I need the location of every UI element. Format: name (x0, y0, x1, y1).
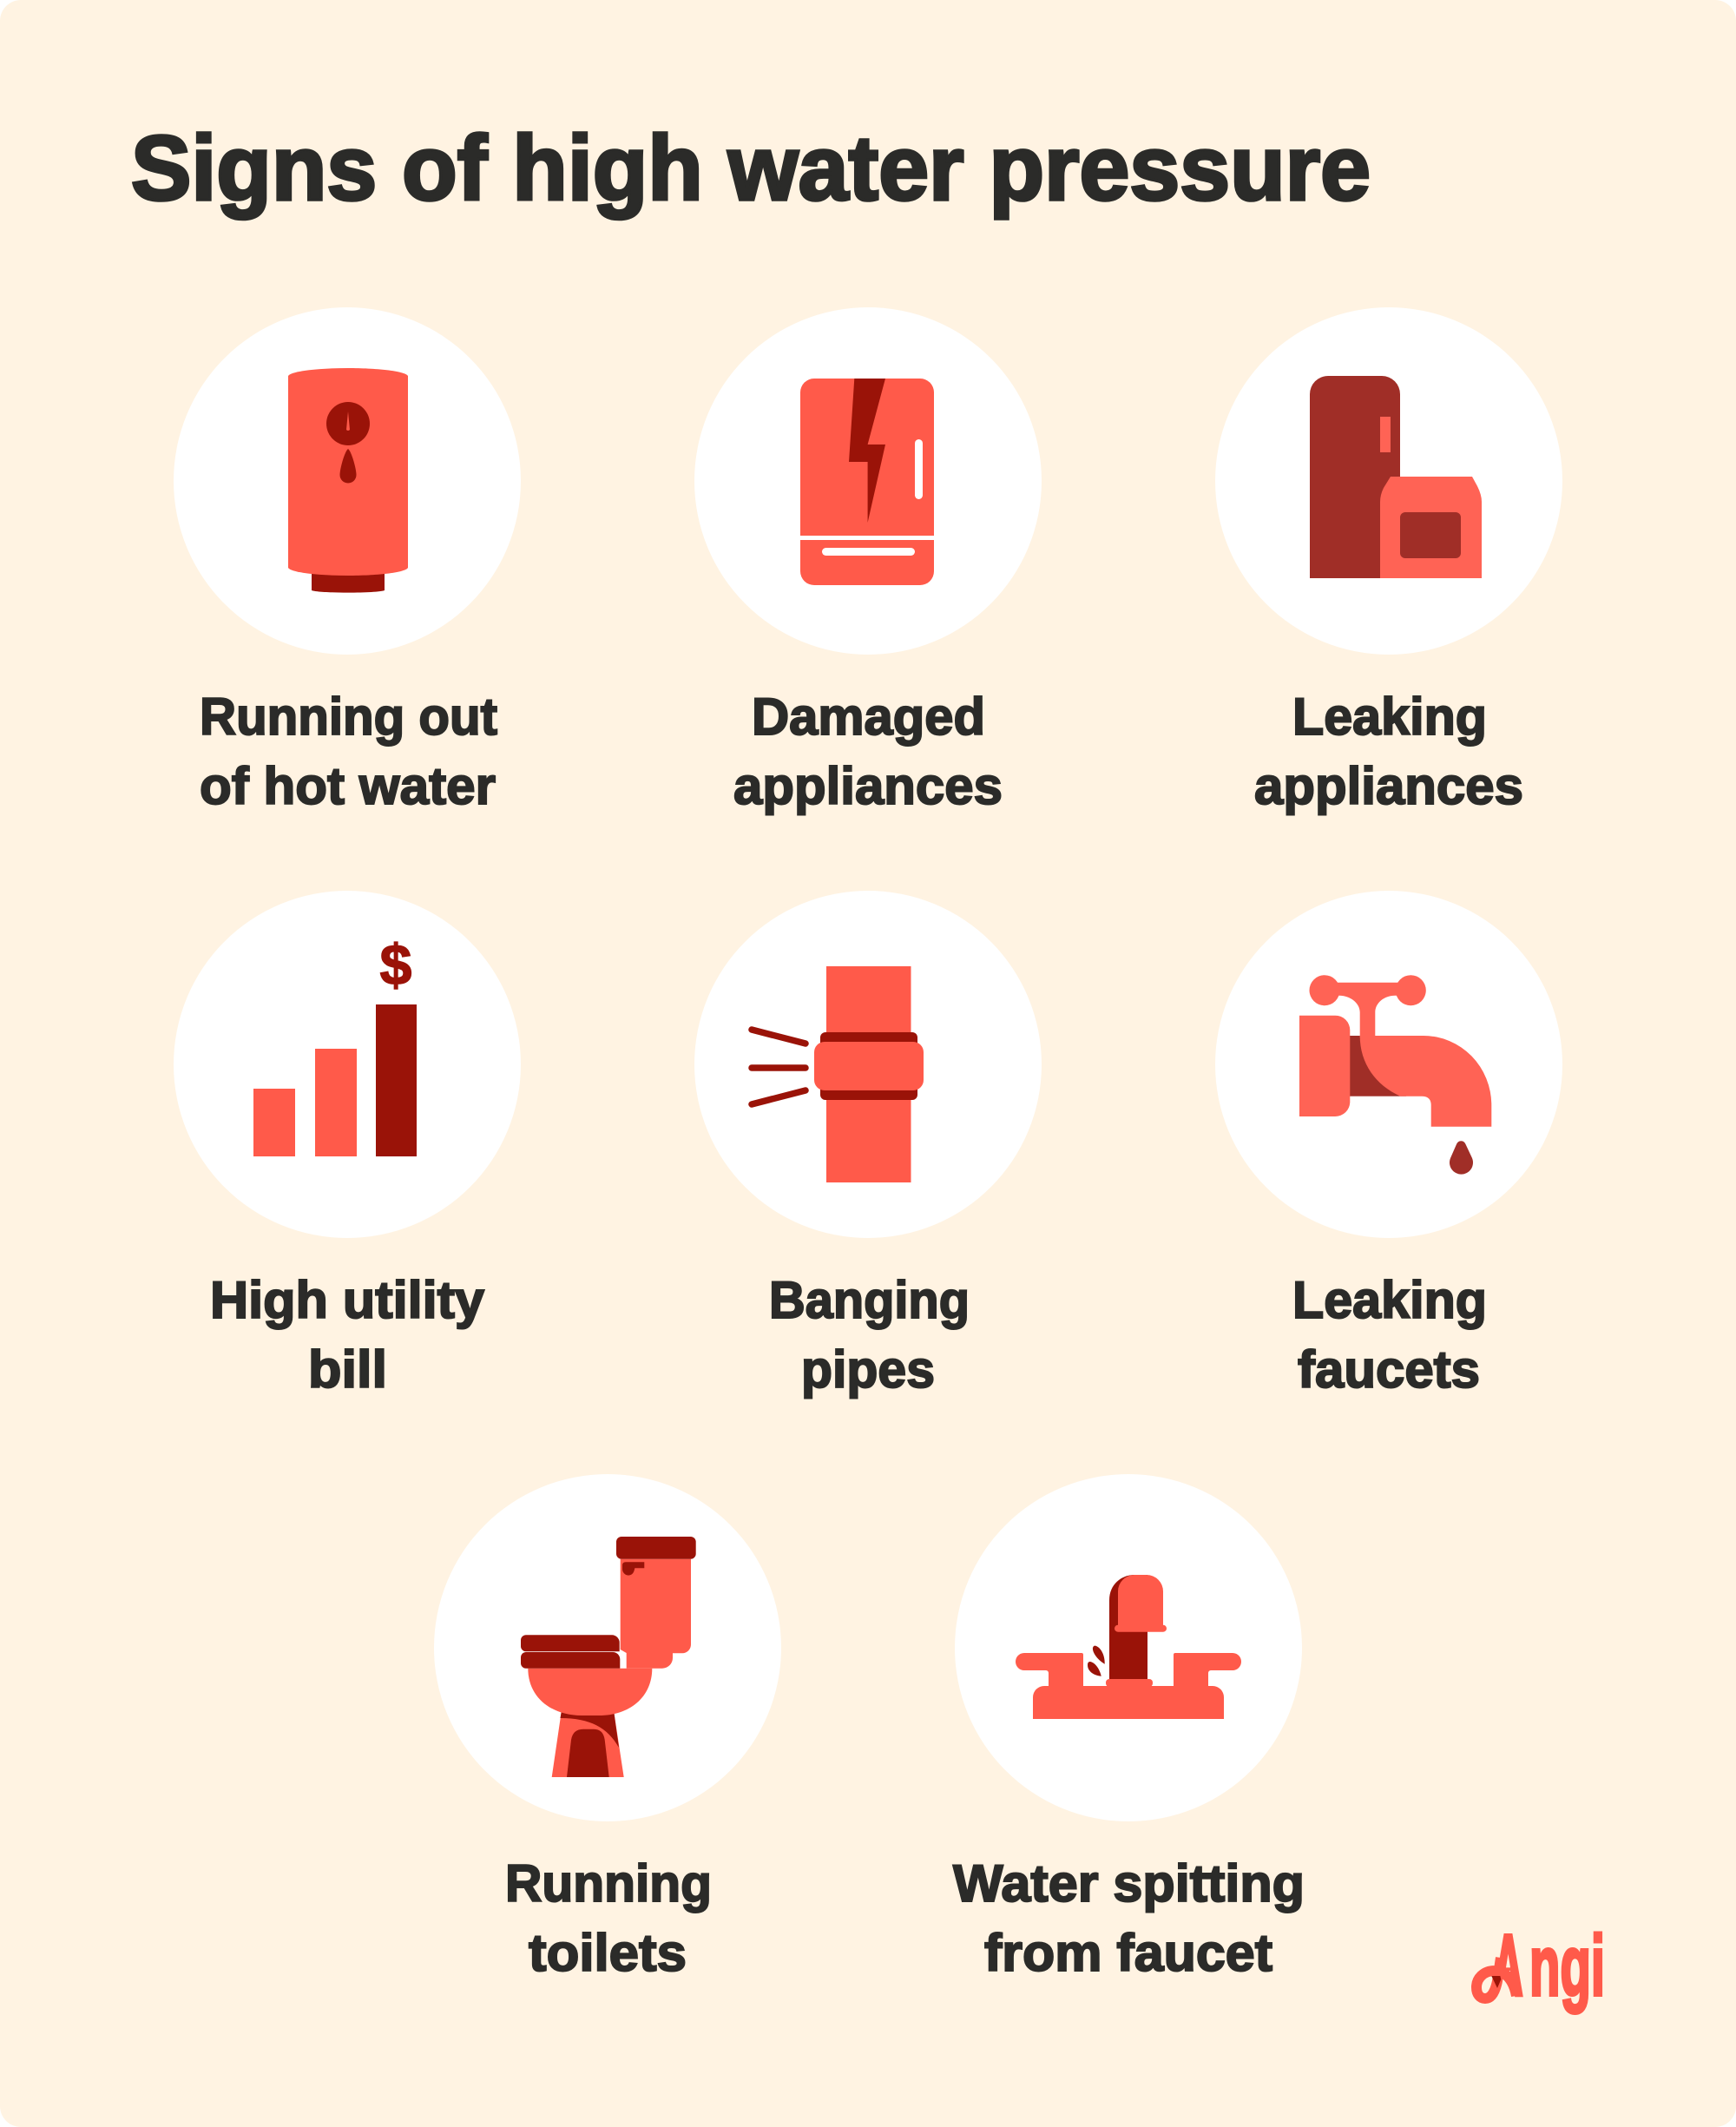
label: Banging (769, 1271, 970, 1329)
icon circle (174, 891, 521, 1238)
label (1292, 1271, 1487, 1399)
icon circle (694, 307, 1042, 655)
icon: toilet (521, 1537, 696, 1777)
panel: leaking faucets (1215, 891, 1562, 1399)
label: Running (505, 1854, 712, 1913)
panel: running out of hot water (174, 307, 521, 815)
label (953, 1854, 1305, 1982)
panel: high utility bill (174, 891, 521, 1399)
label: of hot water (200, 757, 496, 815)
icon: rising bar chart with dollar sign (253, 932, 417, 1156)
label: faucets (1298, 1340, 1480, 1399)
icon: damaged refrigerator (800, 379, 934, 585)
label: Water spitting (953, 1854, 1305, 1913)
label: appliances (733, 757, 1003, 815)
label: pipes (801, 1340, 935, 1399)
icon: rising bar chart with dollar sign: $ (380, 932, 411, 997)
panel: water spitting from faucet (953, 1474, 1305, 1982)
logo: Angi: ngi (1529, 1918, 1605, 2013)
label: Running out (200, 688, 497, 746)
icon circle (694, 891, 1042, 1238)
icon: sink faucet spitting water (1016, 1575, 1241, 1719)
icon: water heater (288, 368, 408, 593)
label: from faucet (984, 1924, 1272, 1982)
panel: banging pipes (694, 891, 1042, 1399)
label (733, 688, 1003, 815)
label: High utility (210, 1271, 485, 1329)
icon: banging pipe (752, 966, 924, 1182)
icon circle (434, 1474, 781, 1821)
label (200, 688, 497, 815)
label: bill (308, 1340, 387, 1399)
logo: Angi: A (1494, 1918, 1522, 2012)
label (1254, 688, 1523, 815)
icon circle (174, 307, 521, 655)
label: Damaged (752, 688, 985, 746)
label (210, 1271, 485, 1399)
label (505, 1854, 712, 1982)
panel: running toilets (434, 1474, 781, 1982)
icon: dripping faucet (1299, 975, 1491, 1175)
icon: refrigerator and washer (1310, 376, 1482, 578)
title: Signs of high water pressure (131, 117, 1371, 220)
panel: leaking appliances (1215, 307, 1562, 815)
label: Leaking (1292, 688, 1487, 746)
label: appliances (1254, 757, 1523, 815)
label: toilets (529, 1924, 687, 1982)
label: Leaking (1292, 1271, 1487, 1329)
panel: damaged appliances (694, 307, 1042, 815)
icon circle (955, 1474, 1302, 1821)
icon circle (1215, 307, 1562, 655)
icon circle (1215, 891, 1562, 1238)
logo: Angi (1471, 1931, 1602, 2015)
label (769, 1271, 970, 1399)
